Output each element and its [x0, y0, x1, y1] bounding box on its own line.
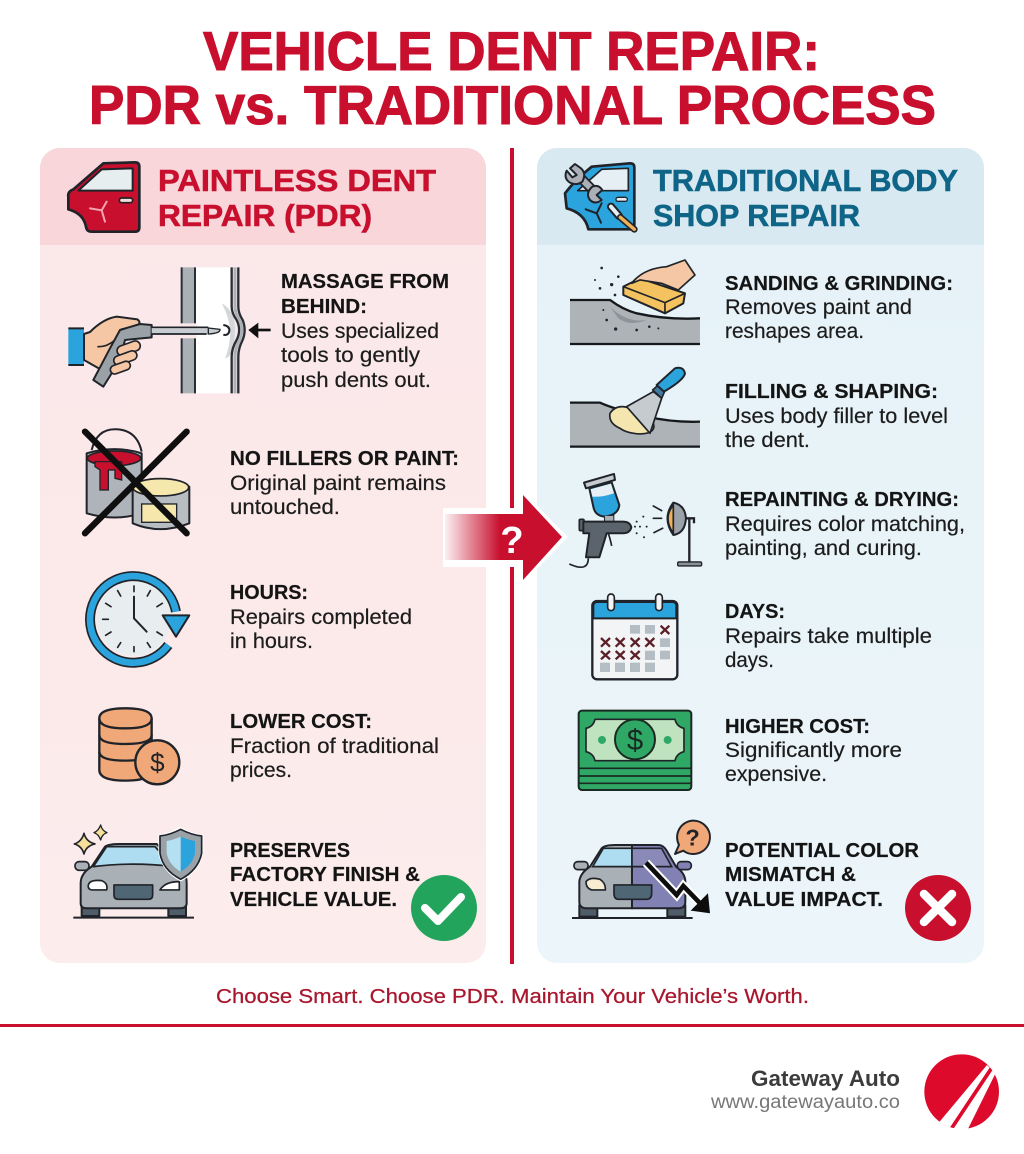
text: hours: HOURS: — [230, 582, 308, 604]
icon: coin stack: $ — [150, 748, 165, 778]
text: repainting and drying — [725, 489, 965, 560]
text: massage from behind: BEHIND: — [281, 296, 367, 318]
heading: PDR: PAINTLESS DENT — [158, 163, 436, 198]
text: higher cost — [725, 716, 902, 786]
heading: traditional — [653, 163, 958, 233]
center divider — [510, 148, 514, 964]
footer brand text: Gateway Auto — [751, 1066, 900, 1091]
icon: sanding block on panel — [570, 260, 700, 344]
text: lower cost — [230, 711, 439, 782]
text: preserves factory finish: FACTORY FINISH & — [230, 864, 420, 886]
text: massage from behind — [281, 271, 449, 392]
text: preserves factory finish — [230, 840, 420, 911]
text: preserves factory finish: PRESERVES — [230, 840, 350, 862]
text: no fillers or paint: untouched. — [230, 496, 340, 519]
text: filling and shaping: FILLING & SHAPING: — [725, 381, 938, 403]
icon: red X badge — [905, 875, 971, 941]
text: repainting and drying: REPAINTING & DRYING: — [725, 489, 959, 511]
text: higher cost: expensive. — [725, 763, 827, 786]
text: higher cost: Significantly more — [725, 739, 902, 762]
arrow with question mark — [443, 495, 568, 580]
tagline: Choose Smart. Choose PDR. Maintain Your Vehicle’s Worth. — [216, 986, 809, 1008]
arrow with question mark: ? — [500, 520, 524, 562]
icon: coin stack — [99, 708, 179, 784]
icon: calendar with crossed days — [592, 594, 677, 679]
text: days: days. — [725, 649, 774, 672]
heading: PDR: REPAIR (PDR) — [158, 198, 372, 233]
title: PDR vs. TRADITIONAL PROCESS — [89, 74, 936, 136]
text: repainting and drying: Requires color matching, — [725, 513, 965, 536]
text: filling and shaping — [725, 381, 948, 452]
text: sanding and grinding — [725, 273, 953, 343]
footer brand text — [710, 1066, 900, 1113]
icon: red car door — [68, 162, 139, 232]
heading: traditional: SHOP REPAIR — [653, 198, 860, 233]
text: no fillers or paint — [230, 448, 459, 519]
text: no fillers or paint: NO FILLERS OR PAINT: — [230, 448, 459, 470]
icon: spreader applying filler — [570, 368, 700, 447]
icon: mismatched car with falling value arrow — [572, 821, 710, 918]
text: no fillers or paint: Original paint remains — [230, 472, 446, 495]
icon: mismatched car with falling value arrow: ? — [686, 825, 700, 851]
panel header: PDR — [40, 148, 486, 245]
icon: stack of cash — [579, 711, 691, 790]
text: massage from behind: MASSAGE FROM — [281, 271, 449, 293]
text: potential color mismatch: POTENTIAL COLOR — [725, 840, 920, 862]
panel: paintless dent repair — [40, 148, 486, 963]
text: days — [725, 601, 932, 672]
icon: green check badge — [411, 875, 477, 941]
text: sanding and grinding: SANDING & GRINDING: — [725, 273, 953, 295]
footer rule — [0, 1024, 1024, 1027]
icon: hand tool massaging dent from behind — [68, 267, 271, 393]
text: filling and shaping: the dent. — [725, 429, 810, 452]
title: VEHICLE DENT REPAIR: — [203, 20, 820, 82]
icon: blue door with wrench and screwdriver — [565, 163, 634, 229]
text: hours: in hours. — [230, 630, 313, 653]
icon: stack of cash: $ — [627, 724, 643, 757]
text: lower cost: LOWER COST: — [230, 711, 372, 733]
footer brand text: www.gatewayauto.co — [710, 1092, 900, 1113]
text: sanding and grinding: Removes paint and — [725, 296, 912, 319]
heading: PDR — [158, 163, 436, 233]
icon: crossed-out paint cans — [85, 429, 189, 533]
text: hours: Repairs completed — [230, 606, 412, 629]
text: filling and shaping: Uses body filler to level — [725, 405, 948, 428]
icon: car with shield and sparkles — [73, 825, 203, 918]
heading: traditional: TRADITIONAL BODY — [653, 163, 958, 198]
icon: clock with circular arrow — [90, 576, 189, 663]
text: days: DAYS: — [725, 601, 785, 623]
text: days: Repairs take multiple — [725, 625, 932, 648]
panel header: traditional — [537, 148, 984, 245]
text: potential color mismatch: VALUE IMPACT. — [725, 889, 883, 911]
text: massage from behind: tools to gently — [281, 344, 421, 367]
text: potential color mismatch — [725, 840, 920, 911]
text: massage from behind: Uses specialized — [281, 320, 439, 343]
text: hours — [230, 582, 412, 653]
text: lower cost: Fraction of traditional — [230, 735, 439, 758]
text: potential color mismatch: MISMATCH & — [725, 864, 856, 886]
text: repainting and drying: painting, and curing. — [725, 537, 922, 560]
logo — [924, 1054, 999, 1132]
text: higher cost: HIGHER COST: — [725, 716, 870, 738]
text: sanding and grinding: reshapes area. — [725, 320, 864, 343]
panel: traditional body shop repair — [537, 148, 984, 963]
icon: spray gun and curing lamp — [569, 474, 702, 567]
text: massage from behind: push dents out. — [281, 369, 431, 392]
title — [89, 20, 936, 136]
text: preserves factory finish: VEHICLE VALUE. — [230, 889, 397, 911]
text: lower cost: prices. — [230, 759, 292, 782]
